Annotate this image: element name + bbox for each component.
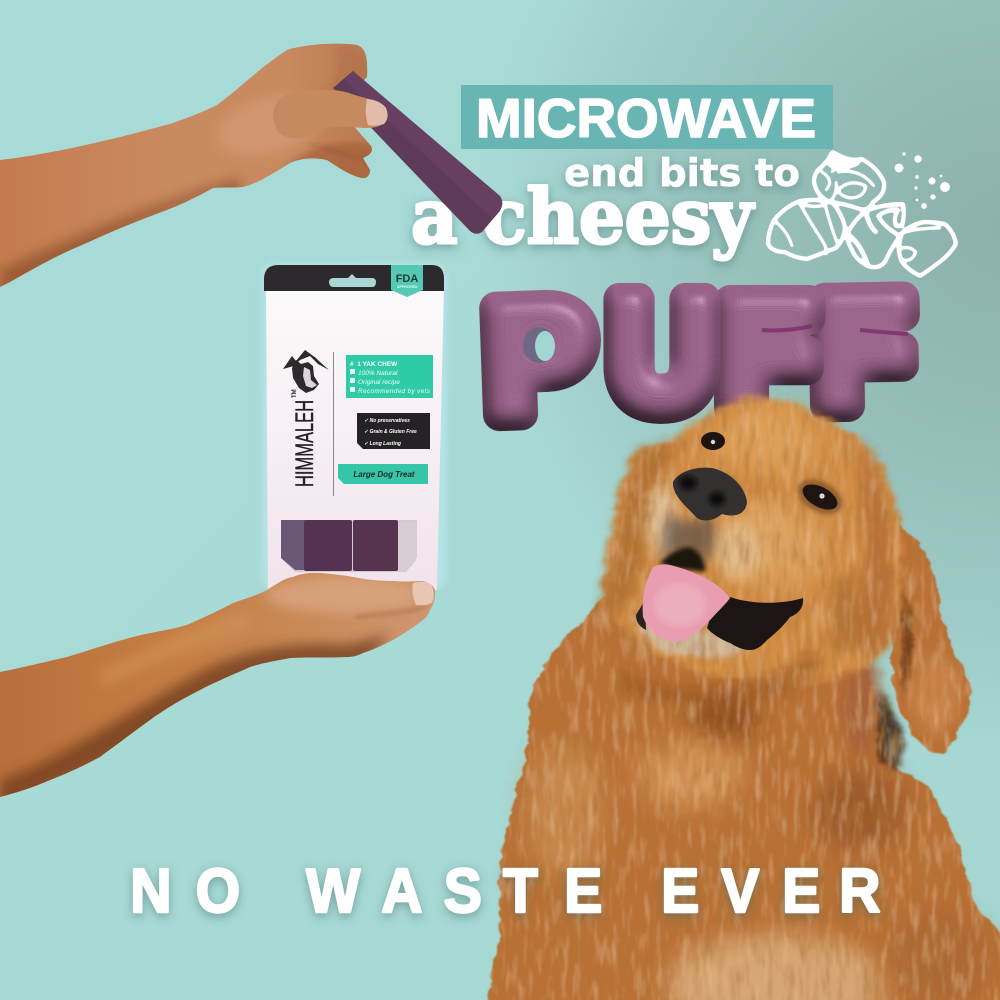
lower finger tone [282, 141, 372, 178]
muzzle grey under nose [660, 513, 715, 565]
mouth top dark [660, 547, 705, 572]
body light chest [635, 740, 745, 810]
forehead light [720, 410, 820, 470]
dog body [490, 540, 1000, 1000]
trademark: TM [292, 389, 298, 398]
rock 2 [768, 200, 845, 259]
finger division [313, 144, 348, 156]
thumb over chew [273, 90, 388, 139]
heading banner: MICROWAVE: MICROWAVE [476, 87, 816, 149]
large dog treat tag: Large Dog Treat [353, 470, 415, 479]
teal claims box: 100% Natural [358, 370, 398, 377]
mouth left corner [636, 600, 646, 630]
ear dark inner [901, 590, 911, 700]
jaw shadow [829, 575, 861, 655]
nostrils [679, 476, 725, 506]
hang slot [329, 274, 376, 287]
nose [673, 468, 747, 521]
FDA badge [391, 265, 423, 297]
right ear [892, 523, 971, 753]
heading: end bits to: end bits to [564, 151, 800, 195]
teal claims box: Recommended by vets [358, 388, 431, 395]
FDA badge: FDA [396, 273, 418, 285]
chew stick [333, 71, 502, 234]
sparkle dots [894, 152, 950, 209]
left head fur shade [600, 440, 680, 617]
letter F second: F [814, 264, 911, 439]
arm under shadow [0, 178, 240, 300]
dark behind ear [878, 690, 905, 770]
body right shade [812, 770, 908, 850]
product pouch [261, 263, 447, 590]
letter F: F [720, 268, 815, 441]
mouth [707, 597, 803, 650]
thumb crease [355, 607, 425, 617]
tongue [643, 564, 730, 642]
black benefits box: ✓ Long Lasting [364, 441, 401, 447]
lower arm under shadow [0, 635, 390, 810]
lower chest cream [665, 935, 885, 1000]
heading: a cheesy: a cheesy [411, 172, 755, 261]
pouch body [266, 285, 444, 590]
left eye [701, 432, 725, 450]
PUFF 3D lettering [484, 264, 911, 448]
golden retriever dog [490, 398, 1000, 1000]
right head shade [854, 440, 893, 657]
dog head [604, 398, 902, 684]
upper arm and hand [0, 44, 372, 287]
pouch window with chews [281, 520, 417, 572]
letter P: P [484, 271, 593, 448]
body light side [527, 740, 603, 880]
teal claims box: Original recipe [358, 379, 400, 386]
forearm highlight [100, 620, 250, 680]
rock 1 [814, 152, 884, 210]
index finger tone [330, 48, 362, 90]
rock 4 [898, 222, 956, 276]
ear lower light [911, 655, 959, 735]
back of hand highlight [218, 96, 310, 154]
black benefits box: ✓ No preservatives [364, 418, 410, 424]
lower arm and hand [0, 572, 436, 797]
teal claims box: # 1 YAK CHEW [350, 361, 398, 368]
body dark patch neck [691, 696, 759, 740]
pouch divider [333, 352, 334, 496]
pouch black header [264, 265, 444, 291]
thumbnail [366, 99, 388, 126]
pouch glow [261, 263, 447, 589]
brand logo: wolf and mountains [283, 350, 329, 393]
FDA badge: APPROVED [397, 285, 417, 289]
neck under mouth shadow [620, 650, 825, 706]
letter U: U [610, 266, 714, 439]
F arm gaps [762, 326, 908, 334]
teal claims box [346, 355, 433, 398]
rock 3 [848, 204, 904, 267]
slogan: NO WASTE EVER: NO WASTE EVER [130, 856, 880, 926]
dog fur group [490, 398, 1000, 1000]
brand name: HIMMALEH [291, 400, 319, 487]
hand highlight [265, 577, 415, 613]
large dog treat tag [338, 464, 428, 484]
chin cream [632, 615, 745, 658]
icon: puffed rocks [768, 152, 956, 276]
right eye [792, 472, 848, 522]
black benefits box: ✓ Grain & Gluten Free [364, 429, 417, 435]
body neck right pink shade [842, 655, 882, 755]
lower right [890, 910, 990, 1000]
thumb nail [412, 582, 434, 605]
P counter hole [523, 327, 555, 363]
tongue highlight [654, 583, 706, 627]
muzzle cream [646, 484, 678, 556]
black benefits box [357, 413, 430, 449]
cheek light [715, 505, 825, 585]
